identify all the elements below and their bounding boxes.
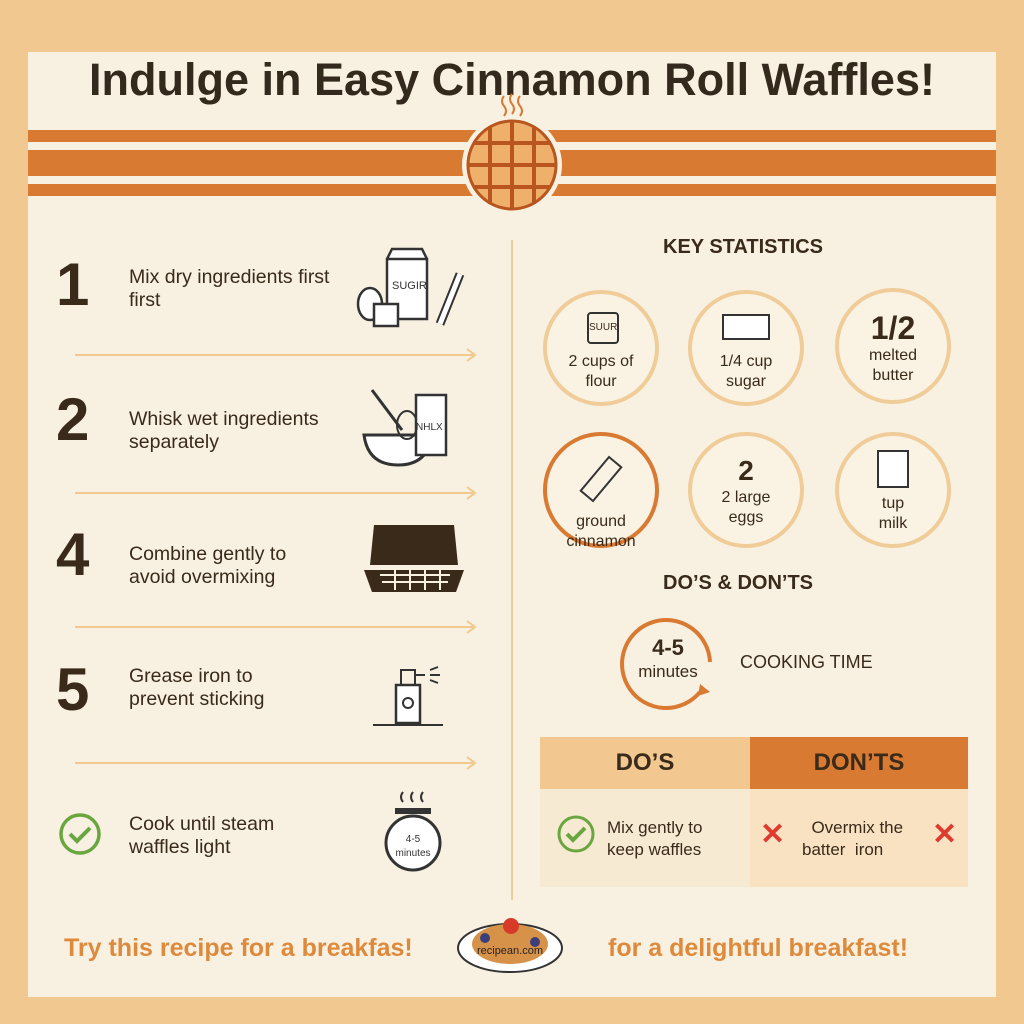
icon: check — [59, 813, 101, 855]
step 5: 5 — [56, 656, 89, 723]
icon: sugar bag: SUGIR — [392, 280, 427, 292]
footer text right: for a delightful breakfast! — [608, 934, 908, 962]
step 1: 1 — [56, 251, 89, 318]
stat: eggs: 2 — [738, 455, 754, 486]
heading: do's & don'ts: DO’S & DON’TS — [663, 572, 813, 594]
stat: flour — [543, 290, 659, 406]
stat: sugar: sugar — [726, 373, 766, 390]
icon: timer: minutes — [395, 848, 431, 859]
icon: waffle — [462, 94, 562, 215]
icon: timer: 4-5 — [406, 834, 421, 845]
divider — [511, 240, 513, 900]
step 4: Combine gently to — [129, 543, 286, 565]
footer text left: Try this recipe for a breakfas! — [64, 934, 413, 962]
stat: sugar — [688, 290, 804, 406]
arrow 2 — [75, 486, 476, 500]
step 4 — [56, 521, 464, 592]
stat: eggs: eggs — [729, 509, 763, 526]
stat: flour: flour — [585, 373, 617, 390]
cooking time: COOKING TIME — [740, 652, 873, 672]
step 2: 2 — [56, 386, 89, 453]
step 4: 4 — [56, 521, 89, 588]
step 2: Whisk wet ingredients — [129, 408, 319, 430]
step 1 — [56, 248, 464, 328]
stat: milk — [835, 432, 951, 548]
title: Indulge in Easy Cinnamon Roll Waffles! — [89, 54, 935, 105]
stat: butter — [835, 288, 951, 404]
arrow 4 — [75, 756, 476, 770]
table: do's and don'ts: Overmix the — [811, 818, 903, 837]
stat: butter: butter — [873, 367, 913, 384]
icon: waffle plate: recipean.com — [477, 945, 543, 957]
stat: butter: 1/2 — [871, 310, 915, 346]
stat: cinnamon: cinnamon — [566, 533, 636, 550]
stat: sugar: 1/4 cup — [720, 353, 772, 370]
stat: flour: SUUR — [589, 322, 617, 333]
header stripes with waffle — [28, 93, 996, 210]
table: do's and don'ts: ✕ — [932, 818, 957, 851]
stat: cinnamon: ground — [576, 513, 626, 530]
stat: flour: 2 cups of — [569, 353, 633, 370]
step: cook: Cook until steam — [129, 813, 274, 835]
table: do's and don'ts: Mix gently to — [607, 818, 702, 837]
step 1: Mix dry ingredients first — [129, 266, 329, 288]
step 5 — [56, 656, 443, 726]
step 2: separately — [129, 431, 219, 453]
table: do's and don'ts: DO’S — [616, 749, 674, 776]
arrow 3 — [75, 620, 476, 634]
table: do's and don'ts: keep waffles — [607, 840, 701, 859]
stat: eggs — [688, 432, 804, 548]
step 5: prevent sticking — [129, 688, 264, 710]
cooking time: minutes — [638, 662, 698, 681]
stat: eggs: 2 large — [722, 489, 770, 506]
cooking time — [620, 618, 873, 710]
cooking time: 4-5 — [652, 635, 684, 660]
step 5: Grease iron to — [129, 665, 253, 687]
step 4: avoid overmixing — [129, 566, 275, 588]
table: do's and don'ts: DON’TS — [814, 749, 904, 776]
stat: cinnamon — [543, 432, 659, 548]
step 2 — [56, 386, 448, 466]
stat: milk: milk — [879, 515, 907, 532]
step 1: first — [129, 289, 160, 311]
heading: key statistics: KEY STATISTICS — [663, 236, 823, 258]
stat: milk: tup — [882, 495, 904, 512]
icon: waffle plate — [457, 918, 563, 973]
icon: bowl — [362, 389, 448, 466]
stat: butter: melted — [869, 347, 917, 364]
icon: waffle iron — [364, 525, 464, 592]
table: do's and don'ts: batter iron — [802, 840, 883, 859]
table: do's and don'ts: ✕ — [760, 818, 785, 851]
arrow 1 — [75, 348, 476, 362]
step: cook — [59, 791, 442, 872]
icon: bowl: NHLX — [416, 422, 443, 433]
table: do's and don'ts — [540, 737, 968, 887]
icon: spray — [373, 666, 443, 726]
icon: sugar bag — [356, 248, 464, 328]
step: cook: waffles light — [129, 836, 231, 858]
icon: timer — [384, 791, 442, 872]
